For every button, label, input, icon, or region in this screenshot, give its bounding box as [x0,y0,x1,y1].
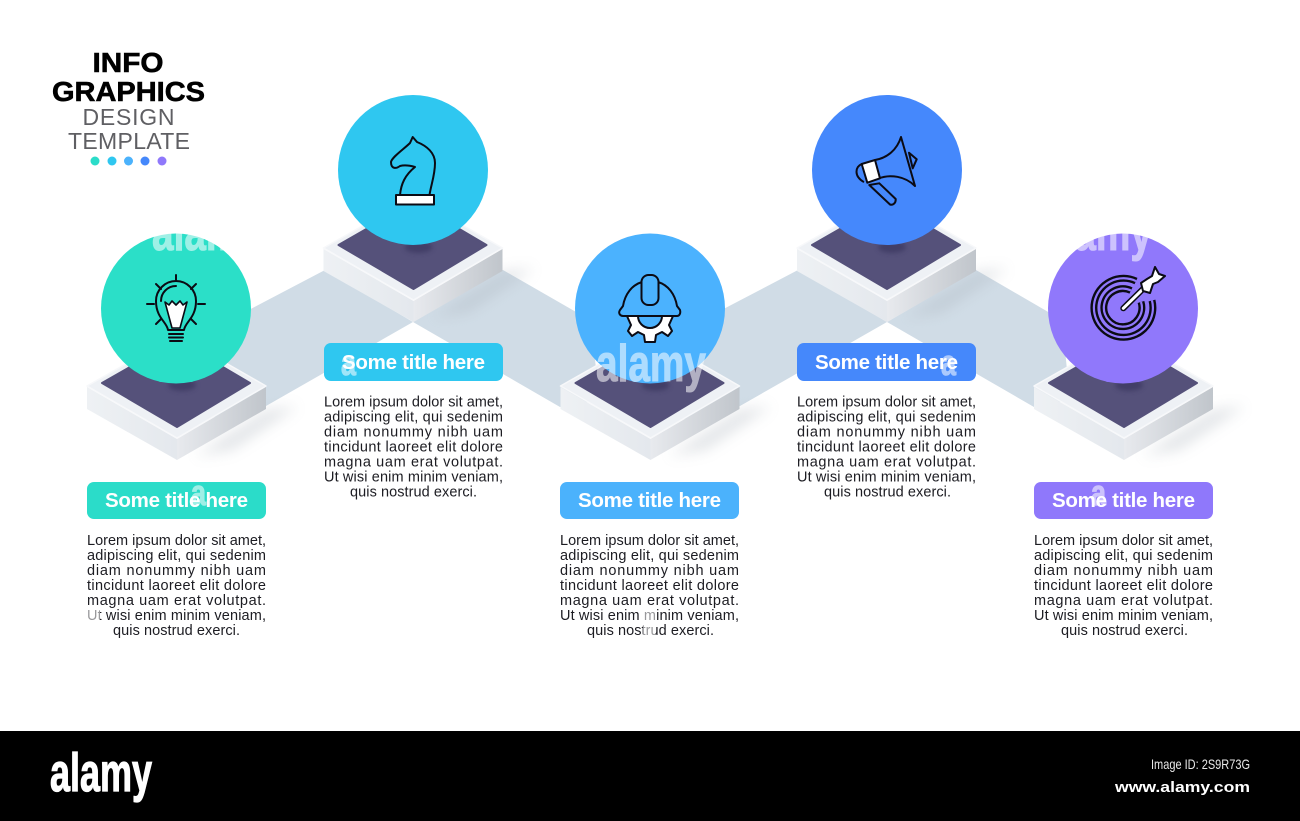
website: www.alamy.com [1114,779,1250,796]
body text 2: Lorem ipsum dolor sit amet, [324,394,503,410]
pedestal 1 [87,335,298,460]
body text 3: magna uam erat volutpat. [560,593,739,609]
watermark fragments: a [341,342,357,383]
footer band [0,731,1300,821]
title 5: Some title here [1052,489,1195,512]
watermark fragments: alamy [1042,204,1152,262]
body text 5: Ut wisi enim minim veniam, [1034,608,1213,624]
body text 5: magna uam erat volutpat. [1034,593,1213,609]
title 2: Some title here [342,351,485,374]
title bar 2 [324,343,503,381]
body text 2: quis nostrud exerci. [350,484,477,500]
title block: GRAPHICS [52,76,205,107]
watermark fragments: a [941,342,957,383]
circle 4 [812,95,962,245]
body text 2: adipiscing elit, qui sedenim [324,410,503,426]
pedestal 2 [324,197,534,322]
image id: Image ID: 2S9R73G [1151,756,1250,772]
watermark fragments: alamy [152,204,262,262]
icon: megaphone [856,137,917,205]
body text 1: tincidunt laoreet elit dolore [87,578,266,594]
body text 5 [1034,533,1213,639]
title block: INFO [92,47,164,78]
body text 1: adipiscing elit, qui sedenim [87,548,266,564]
watermark fragments [87,204,1152,636]
title block: TEMPLATE [68,128,190,154]
body text 5: Lorem ipsum dolor sit amet, [1034,533,1213,549]
body text 1: Ut wisi enim minim veniam, [87,608,266,624]
body text 4: Ut wisi enim minim veniam, [797,470,976,486]
body text 1: quis nostrud exerci. [113,623,240,639]
title bar 3 [560,482,739,519]
circle 1 [101,234,251,384]
body text 2: diam nonummy nibh uam [324,424,503,440]
body text 2: tincidunt laoreet elit dolore [324,440,503,456]
body text 4: tincidunt laoreet elit dolore [797,440,976,456]
icon: helmet and gear [619,275,680,342]
body text 4: diam nonummy nibh uam [797,424,976,440]
connecting bands [200,270,1070,420]
body text 1 [87,533,266,639]
step 2: strategy [324,95,534,500]
icon: chess knight [391,137,435,204]
body text 1: diam nonummy nibh uam [87,563,266,579]
body text 5: quis nostrud exerci. [1061,623,1188,639]
body text 1: magna uam erat volutpat. [87,593,266,609]
circle 3 [575,234,725,384]
pedestal 5 [1034,335,1245,460]
title 1: Some title here [105,489,248,512]
body text 3: Ut wisi enim minim veniam, [560,608,739,624]
body text 3: quis nostrud exerci. [587,623,714,639]
body text 2: magna uam erat volutpat. [324,454,503,470]
watermark: centre: alamy [596,335,706,393]
body text 5: adipiscing elit, qui sedenim [1034,548,1213,564]
step 4: marketing [797,95,1008,500]
body text 3 [560,533,739,639]
body text 5: diam nonummy nibh uam [1034,563,1213,579]
body text 4 [797,394,976,500]
body text 1: Lorem ipsum dolor sit amet, [87,533,266,549]
footer logo: alamy [50,743,152,803]
icon: target and arrow [1094,267,1165,337]
pedestal 3 [560,335,772,460]
body text 4: magna uam erat volutpat. [797,454,976,470]
body text 4: adipiscing elit, qui sedenim [797,410,976,426]
title bar 5 [1034,482,1213,519]
icon: light bulb [147,275,205,341]
body text 3: tincidunt laoreet elit dolore [560,578,739,594]
body text 2 [324,394,503,500]
title block [52,47,205,166]
pedestal 4 [797,197,1008,322]
title bar 4 [797,343,976,381]
body text 4: Lorem ipsum dolor sit amet, [797,394,976,410]
circle 2 [338,95,488,245]
step 1: idea [87,234,298,639]
body text 3: adipiscing elit, qui sedenim [560,548,739,564]
body text 2: Ut wisi enim minim veniam, [324,470,503,486]
title 4: Some title here [815,351,958,374]
body text 3: Lorem ipsum dolor sit amet, [560,533,739,549]
body text 4: quis nostrud exerci. [824,484,951,500]
step 3: engineering [560,234,772,639]
body text 5: tincidunt laoreet elit dolore [1034,578,1213,594]
circle 5 [1048,234,1198,384]
body text 3: diam nonummy nibh uam [560,563,739,579]
watermark fragments: a [1091,472,1107,513]
title 3: Some title here [578,489,721,512]
step 5: target [1034,234,1245,639]
title bar 1 [87,482,266,519]
title block: DESIGN [82,104,174,130]
watermark fragments: a [191,472,207,513]
